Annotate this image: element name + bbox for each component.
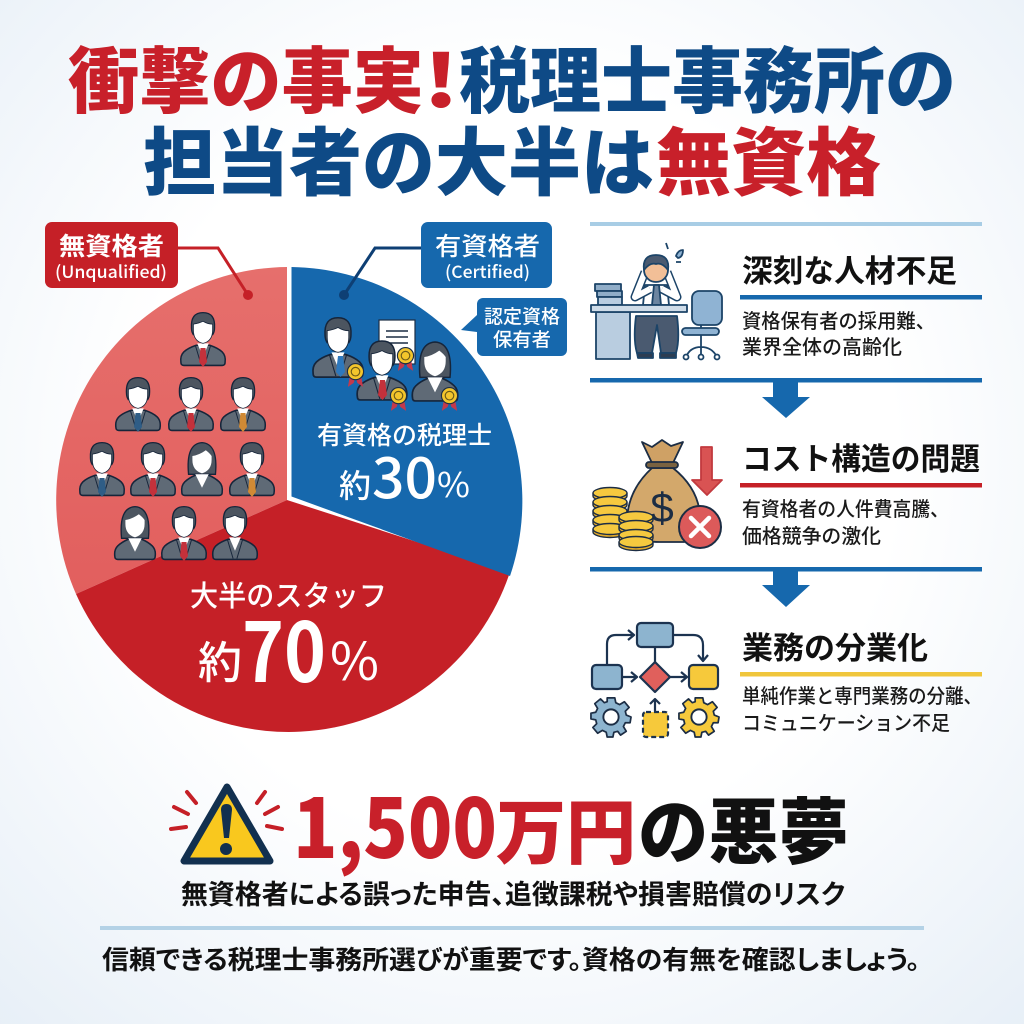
label: majority staff 70%: 約 (198, 627, 242, 691)
callout: certified (339, 222, 552, 300)
text: labor cost and price competition: 有資格者の人件費高騰、 (742, 493, 949, 522)
pie slice: unqualified staff (light red) (56, 267, 287, 594)
heading: severe staff shortage: 深刻な人材不足 (742, 246, 957, 291)
text: labor cost and price competition: 価格競争の激化 (742, 520, 881, 549)
text: hiring difficulty and aging (742, 305, 935, 360)
pie slice: majority staff 70% (dark red) (76, 500, 510, 732)
label: qualified tax accountants 30%: 約 (339, 461, 371, 507)
divider and arrow 1 (590, 378, 982, 418)
label: majority staff 70% (190, 573, 387, 706)
title: 衝撃の事実 (68, 23, 424, 128)
headline: 15 million yen nightmare (293, 763, 849, 882)
text: separation and lack of communication: 単純作業と専門業務の分離、 (742, 680, 982, 709)
text: separation and lack of communication (742, 680, 982, 736)
speech bubble: certified qualification holders: 保有者 (493, 325, 551, 352)
divider and arrow 2 (590, 567, 982, 607)
headline: 15 million yen nightmare: 万円 (496, 777, 636, 879)
headline: 15 million yen nightmare: の悪夢 (638, 774, 849, 879)
heading: cost structure problem: コスト構造の問題 (742, 434, 980, 479)
pie slice: certified 30% (blue) (292, 267, 522, 576)
title (68, 23, 956, 211)
speech bubble: certified qualification holders: 認定資格 (484, 302, 560, 329)
callout: unqualified (45, 222, 253, 300)
label: qualified tax accountants 30%: 有資格の税理士 (317, 416, 492, 452)
callout: certified: 有資格者 (435, 227, 540, 263)
heading: division of labor: 業務の分業化 (742, 623, 928, 668)
top divider (590, 222, 982, 226)
headline: 15 million yen nightmare: 1,500 (293, 763, 497, 882)
text: hiring difficulty and aging: 資格保有者の採用難、 (742, 305, 935, 334)
text: hiring difficulty and aging: 業界全体の高齢化 (742, 331, 902, 360)
label: majority staff 70%: % (330, 620, 379, 695)
label: qualified tax accountants 30% (317, 416, 492, 514)
icon: money bag with coins and down arrow: $ (650, 484, 674, 531)
right panel: causes (590, 222, 982, 737)
group of unqualified staff icons (80, 313, 274, 561)
callout: unqualified: (Unqualified) (55, 258, 167, 283)
title: ! (423, 23, 459, 128)
label: qualified tax accountants 30%: 30 (372, 434, 437, 514)
label: majority staff 70%: 大半のスタッフ (190, 573, 387, 615)
certified staff icons with certificate (313, 318, 458, 411)
certificate (379, 320, 415, 371)
title: 担当者の大半は (143, 104, 654, 211)
bottom divider (100, 926, 924, 930)
icon: workflow diagram with gears (591, 623, 719, 737)
text: closing message: 信頼できる税理士事務所選びが重要です。資格の有無を確認しましょう。 (102, 940, 920, 977)
text: separation and lack of communication: コミュニケーション不足 (742, 707, 950, 736)
icon: money bag with coins and down arrow (593, 440, 722, 550)
label: majority staff 70%: 70 (242, 587, 326, 706)
title: 無資格 (656, 104, 881, 211)
callout: certified: (Certified) (445, 258, 530, 283)
title: 税理士事務所の (459, 23, 956, 128)
speech bubble: certified qualification holders (461, 298, 567, 356)
icon: stressed worker at desk (591, 243, 722, 360)
label: qualified tax accountants 30%: % (437, 458, 470, 507)
text: risk description: 無資格者による誤った申告、追徴課税や損害賠償のリスク (181, 873, 845, 912)
callout: unqualified: 無資格者 (59, 227, 164, 263)
text: labor cost and price competition (742, 493, 949, 549)
pie chart (56, 267, 522, 732)
icon: warning triangle (171, 787, 282, 861)
